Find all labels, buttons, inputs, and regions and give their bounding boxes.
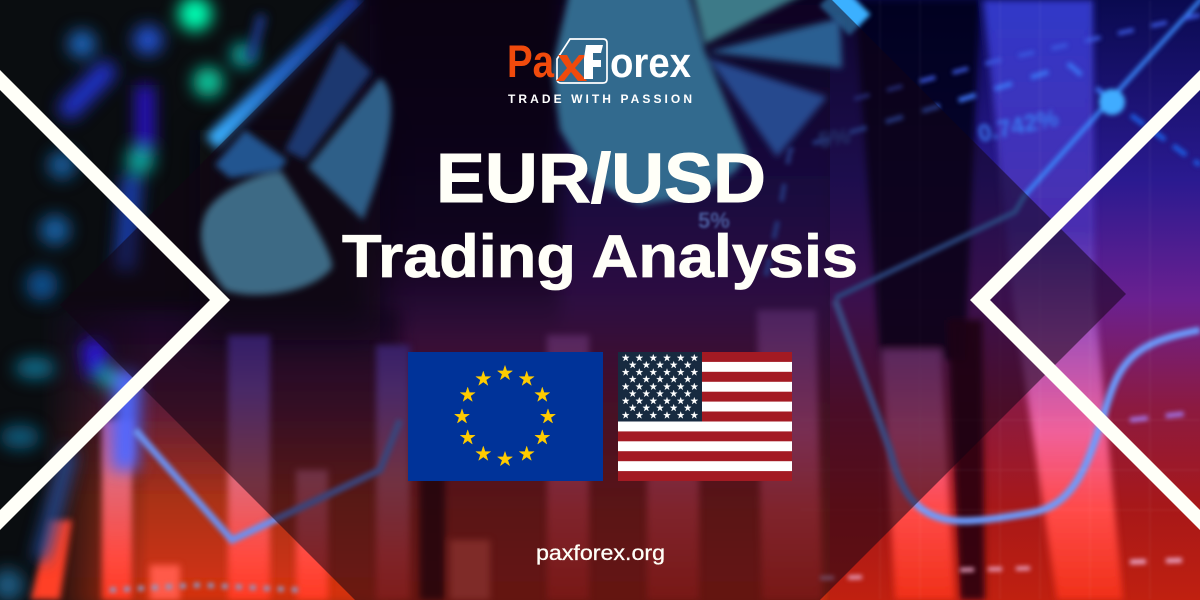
chart lines	[1025, 0, 1200, 195]
background: blurred financial chart photo: 5%	[817, 123, 852, 153]
bars	[983, 0, 1123, 600]
website url: paxforex.org	[536, 542, 665, 565]
grid lines	[800, 0, 1200, 600]
logo: PaxForex: orex	[610, 39, 692, 86]
logo badge	[557, 39, 607, 83]
faint chart label inside diamond: 5%	[698, 208, 730, 233]
logo: PaxForex: Pa	[507, 36, 555, 87]
pie chart shapes inside diamond	[201, 0, 842, 295]
flag: European Union	[408, 352, 603, 481]
right white chevron arrow	[970, 70, 1200, 530]
left white chevron arrow	[0, 70, 230, 530]
title: EUR/USD: EUR/USD	[436, 139, 766, 217]
logo tagline: TRADE WITH PASSION	[508, 92, 692, 106]
flag: United States	[618, 352, 792, 481]
background: blurred financial chart photo: 0.742%	[976, 105, 1061, 148]
subtitle: Trading Analysis: Trading Analysis	[342, 223, 858, 290]
logo: PaxForex	[507, 36, 692, 87]
